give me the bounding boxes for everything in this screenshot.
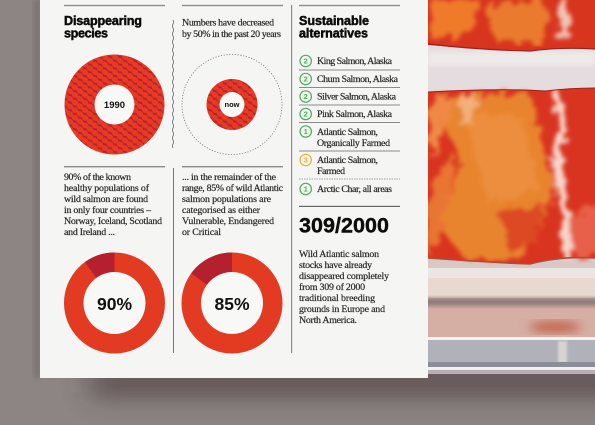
photo: salmon fillets in a tray	[420, 0, 595, 374]
text: numbers have decreased: Numbers have decreased	[182, 18, 274, 28]
text: 85 percent of populations: ... in the remainder of the	[182, 172, 277, 183]
chart: 85 percent donut: 85%	[214, 294, 250, 314]
big number: 309/2000	[299, 214, 389, 238]
list: salmon ratings: Atlantic Salmon,	[317, 155, 378, 166]
heading: disappearing species: Disappearing	[64, 14, 142, 28]
list: salmon ratings	[299, 55, 400, 195]
chart: 1990 donut	[64, 54, 164, 154]
panel: disappearing species	[64, 5, 165, 154]
text: wild Atlantic salmon stocks: North America.	[299, 315, 357, 326]
panel: 309 of 2000	[299, 206, 400, 326]
text: wild Atlantic salmon stocks	[299, 249, 389, 326]
list: salmon ratings: Arctic Char, all areas	[317, 184, 392, 195]
list: salmon ratings: 2	[304, 110, 308, 119]
list: salmon ratings: Silver Salmon, Alaska	[317, 92, 397, 102]
text: wild Atlantic salmon stocks: traditional breeding	[299, 293, 375, 304]
text: wild Atlantic salmon stocks: Wild Atlantic salmon	[299, 249, 379, 260]
wavy divider	[172, 20, 174, 148]
list: salmon ratings: 2	[304, 75, 308, 84]
text: 85 percent of populations: Vulnerable, Endangered	[182, 216, 274, 227]
text: 90 percent of populations	[64, 172, 162, 238]
chart: 1990 donut: 1990	[104, 100, 125, 111]
list: salmon ratings: Organically Farmed	[317, 138, 390, 149]
white foam gap	[428, 45, 595, 92]
list: salmon ratings: King Salmon, Alaska	[317, 56, 393, 67]
text: 85 percent of populations	[182, 172, 284, 238]
text: 90 percent of populations: wild salmon are found	[64, 194, 148, 205]
text: wild Atlantic salmon stocks: disappeared completely	[299, 271, 389, 282]
text: 85 percent of populations: range, 85% of wild Atlantic	[182, 183, 284, 194]
heading: sustainable alternatives: Sustainable	[299, 14, 369, 28]
heading: sustainable alternatives: alternatives	[299, 26, 368, 40]
list: salmon ratings: Pink Salmon, Alaska	[317, 109, 393, 120]
panel: sustainable alternatives	[299, 5, 400, 195]
text: 90 percent of populations: in only four countries –	[64, 205, 151, 216]
panel: 85 percent	[182, 166, 284, 354]
list: salmon ratings: 2	[304, 92, 308, 101]
heading: disappearing species	[64, 14, 142, 40]
text: 85 percent of populations: salmon populations are	[182, 194, 272, 205]
list: salmon ratings: 3	[304, 156, 308, 165]
vertical divider	[291, 5, 292, 353]
text: numbers have decreased: by 50% in the past 20 years	[182, 29, 281, 40]
chart: 85 percent donut	[182, 252, 282, 354]
main fillet	[426, 88, 595, 264]
text: wild Atlantic salmon stocks: stocks have already	[299, 260, 372, 271]
list: salmon ratings: Atlantic Salmon,	[317, 127, 378, 138]
text: 85 percent of populations: or Critical	[182, 227, 221, 238]
top fillet	[428, 0, 595, 51]
chart: 90 percent donut	[64, 252, 165, 354]
heading: sustainable alternatives	[299, 14, 369, 40]
chart: 90 percent donut: 90%	[97, 294, 132, 314]
heading: disappearing species: species	[64, 26, 108, 40]
text: 90 percent of populations: healthy populations of	[64, 183, 150, 194]
tray	[420, 258, 595, 374]
text: 90 percent of populations: Norway, Iceland, Scotland	[64, 216, 162, 227]
chart: now donut	[182, 54, 282, 154]
panel: numbers decreased	[182, 5, 283, 154]
chart: now donut: now	[224, 100, 240, 109]
panel: 90 percent	[64, 166, 165, 354]
list: salmon ratings: Farmed	[317, 166, 345, 177]
list: salmon ratings: Chum Salmon, Alaska	[317, 74, 399, 85]
list: salmon ratings: 2	[304, 57, 308, 66]
text: wild Atlantic salmon stocks: from 309 of 2000	[299, 282, 365, 293]
text: 85 percent of populations: categorised as either	[182, 205, 261, 216]
paper sheet	[40, 0, 428, 378]
list: salmon ratings: 1	[304, 127, 308, 136]
text: wild Atlantic salmon stocks: grounds in Europe and	[299, 304, 385, 315]
text: 90 percent of populations: 90% of the known	[64, 172, 131, 183]
vertical divider	[173, 168, 174, 353]
text: 90 percent of populations: and Ireland ...	[64, 227, 115, 238]
list: salmon ratings: 1	[304, 185, 308, 194]
text: numbers have decreased	[182, 18, 281, 40]
